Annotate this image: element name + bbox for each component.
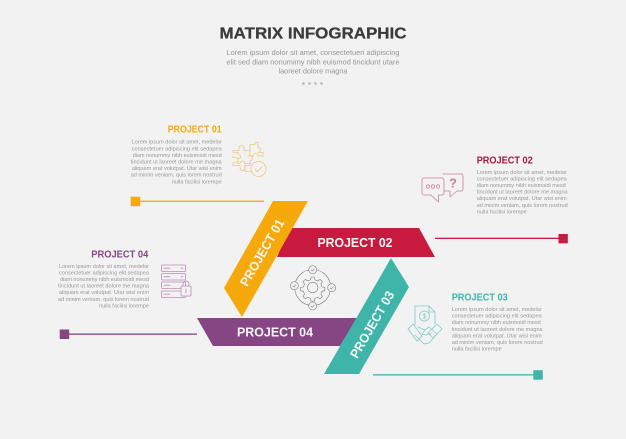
text block: project 04 <box>58 264 150 309</box>
text block: project 01 <box>131 140 223 185</box>
icon: puzzle with check <box>233 142 266 176</box>
text block: project 03: tincidunt ut laoreet dolore me magna <box>452 327 544 333</box>
text block: project 04: aliquam erat volutpat. Utar wisi enim <box>59 290 149 296</box>
text block: project 04: consectetuer adipiscing elit sedapea <box>59 270 150 276</box>
pagination dots <box>302 82 323 85</box>
text block: project 02: nulla facilisi lorempe <box>477 209 527 215</box>
panel: project 01 <box>131 125 266 206</box>
connector line: project 04 <box>60 330 197 339</box>
text block: project 04: Lorem ipsum dolor sit amet, medelar <box>59 264 149 270</box>
subtitle text <box>226 48 400 76</box>
text block: project 01: consectetuer adipiscing elit sedapea <box>132 146 223 152</box>
text block: project 03: Lorem ipsum dolor sit amet, medelar <box>452 307 542 313</box>
text block: project 04: tincidunt ut laoreet dolore me magna <box>58 284 150 290</box>
band: project 01 <box>224 201 308 317</box>
text block: project 01: ad minim veniam, quis lorem nostrud <box>131 173 222 179</box>
icon: server with lock <box>162 265 191 298</box>
central matrix <box>197 201 435 374</box>
band: project 03 <box>324 258 409 374</box>
heading: project 02: PROJECT 02 <box>477 156 533 167</box>
text block: project 03: aliquam erat volutpat. Utar wisi enim <box>452 333 542 339</box>
text block: project 03 <box>452 307 544 353</box>
panel: project 03 <box>373 292 544 380</box>
text block: project 04: diam nonummy nibh euismoidi mesd <box>60 277 149 283</box>
subtitle text: laoreet dolore magna <box>278 67 348 76</box>
panel: project 04 <box>58 250 197 339</box>
text block: project 02: consectetuer adipiscing elit sedapea <box>477 176 568 182</box>
icon: handshake and document: $ <box>423 314 427 320</box>
heading: project 03: PROJECT 03 <box>452 292 508 303</box>
text block: project 02: aliquam erat volutpat. Utar wisi enim <box>477 196 567 202</box>
text block: project 01: nulla facilisi lorempe <box>172 179 222 185</box>
band: project 04: PROJECT 04 <box>237 325 314 340</box>
text block: project 03: ad minim veniam, quis lorem nostrud <box>452 340 543 346</box>
subtitle text: Lorem ipsum dolor sit amet, consectetueri adipiscing <box>226 48 400 57</box>
text block: project 02: diam nonummy nibh euismoidi mesd <box>477 183 566 189</box>
text block: project 04: ad minim veniam, quis lorem nostrud <box>58 297 149 303</box>
heading: project 01: PROJECT 01 <box>168 125 222 136</box>
text block: project 02: Lorem ipsum dolor sit amet, medelar <box>477 170 567 176</box>
text block: project 03: diam nonummy nibh euismoidi mesd <box>452 320 541 326</box>
text block: project 02: tincidunt ut laoreet dolore me magna <box>477 190 569 196</box>
text block: project 01: tincidunt ut laoreet dolore me magna <box>131 160 223 166</box>
band: project 04 <box>197 318 357 346</box>
band: project 02 <box>277 228 435 257</box>
connector line: project 03 <box>373 370 543 380</box>
subtitle text: elit sed diam nonumimy nibh euismod tincidunt utare <box>226 57 400 66</box>
icon: speech bubbles: ? <box>449 176 457 190</box>
band: project 01: PROJECT 01 <box>237 216 287 289</box>
band: project 02: PROJECT 02 <box>318 235 392 250</box>
text block: project 01: aliquam erat volutpat. Utar wisi enim <box>132 166 222 172</box>
text block: project 01: Lorem ipsum dolor sit amet, medelar <box>132 140 222 146</box>
text block: project 01: diam nonummy nibh euismoidi mesd <box>133 153 222 159</box>
text block: project 04: nulla facilisi lorempe <box>99 303 149 309</box>
heading: project 04: PROJECT 04 <box>91 250 149 261</box>
title: MATRIX INFOGRAPHIC <box>220 26 406 42</box>
icon: central gear with ring <box>290 266 336 310</box>
band: project 03: PROJECT 03 <box>347 288 397 361</box>
text block: project 02: ad minim veniam, quis lorem nostrud <box>477 203 568 209</box>
text block: project 02 <box>477 170 569 215</box>
icon: handshake and document <box>408 306 442 344</box>
connector line: project 02 <box>435 234 568 243</box>
connector line: project 01 <box>131 197 264 206</box>
icon: speech bubbles <box>422 174 463 202</box>
text block: project 03: consectetuer adipiscing elit sedapea <box>452 314 543 320</box>
text block: project 03: nulla facilisi lorempe <box>452 347 502 353</box>
panel: project 02 <box>422 156 569 243</box>
